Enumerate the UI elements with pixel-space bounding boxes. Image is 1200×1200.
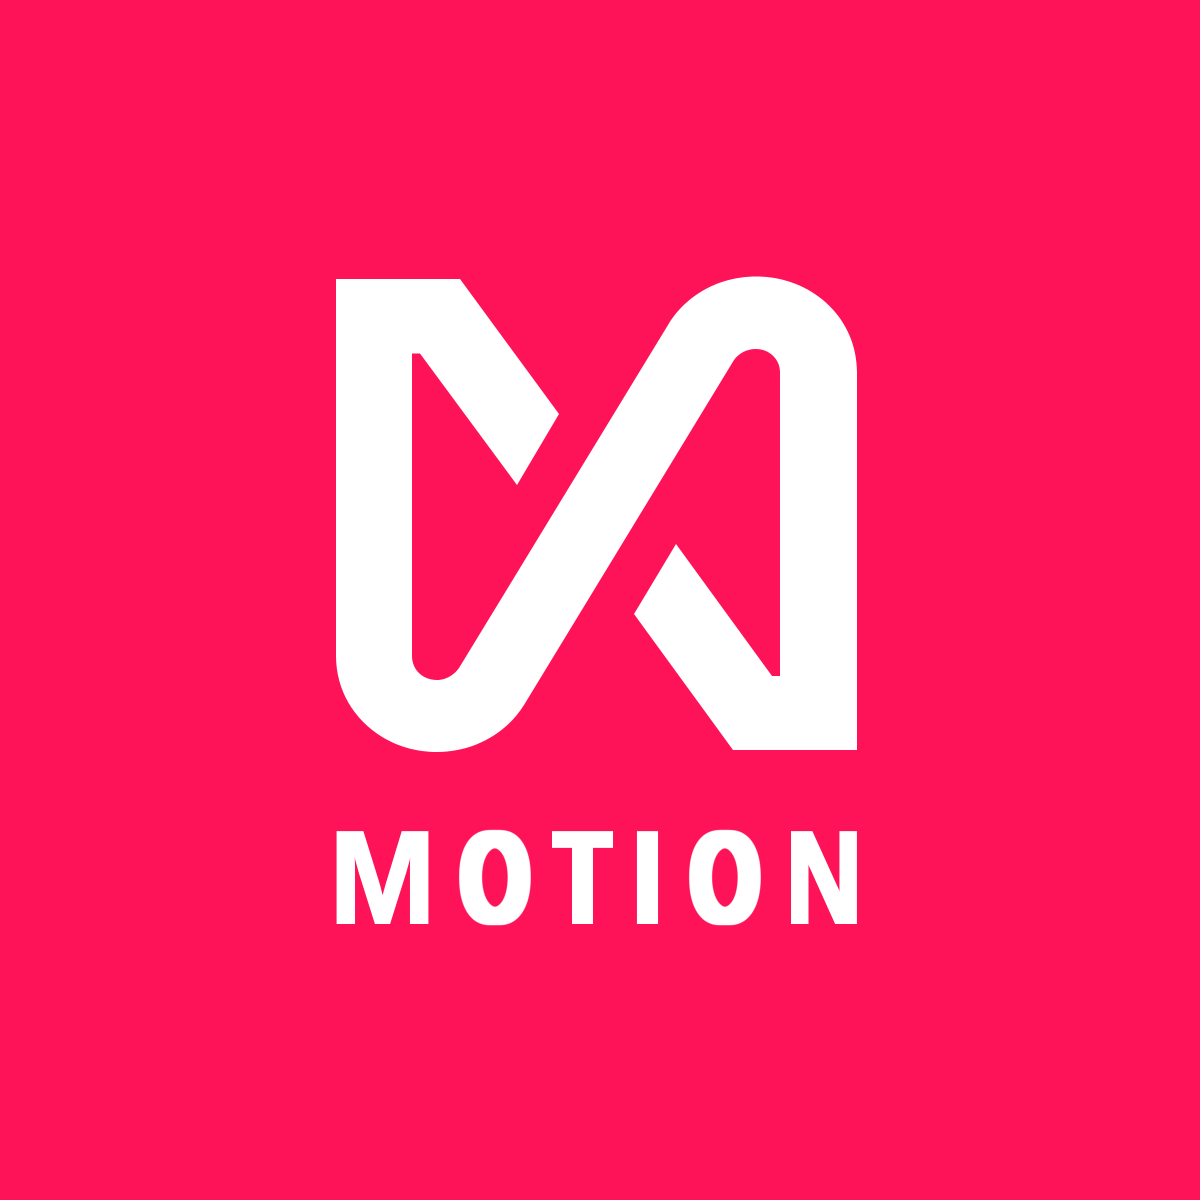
title: MOTION wordmark: T xyxy=(555,804,610,951)
title: MOTION wordmark: I xyxy=(631,804,664,951)
icon: Motion logo mark xyxy=(336,276,857,752)
title: MOTION wordmark: O xyxy=(690,804,760,951)
title: MOTION wordmark: N xyxy=(786,804,862,951)
title: MOTION wordmark xyxy=(329,804,862,951)
title: MOTION wordmark: O xyxy=(460,804,530,951)
title: MOTION wordmark: M xyxy=(329,804,436,951)
